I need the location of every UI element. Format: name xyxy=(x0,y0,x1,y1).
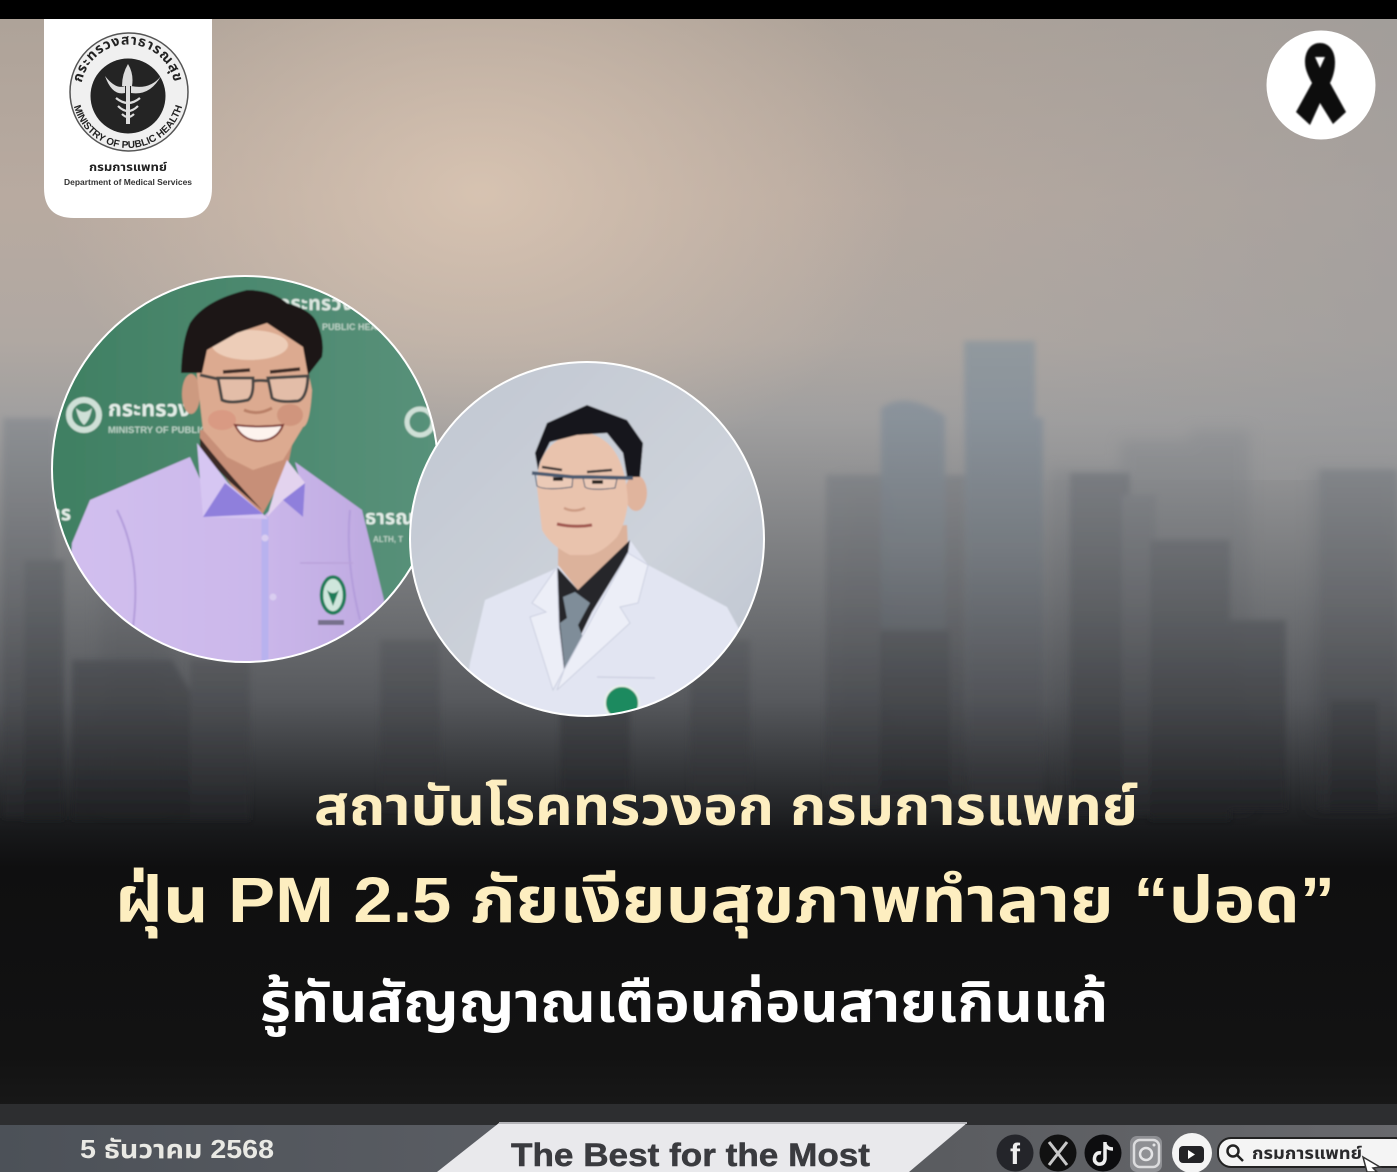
lapels xyxy=(530,567,564,690)
ear xyxy=(182,374,200,414)
eyebrows xyxy=(542,467,612,472)
eyes xyxy=(553,479,603,482)
seal: Ministry of Public Health: MINISTRY OF PUBLIC HEALTH xyxy=(74,104,182,148)
seal: Ministry of Public Health: กระทรวงสาธารณสุข xyxy=(74,36,182,82)
icon: facebook xyxy=(996,1134,1034,1172)
portrait: doctor in purple shirt xyxy=(50,275,440,670)
backdrop logos and wording: าร xyxy=(52,503,71,525)
icon: cursor xyxy=(1363,1157,1380,1172)
grey tie xyxy=(560,592,590,670)
mouth xyxy=(557,524,592,526)
seal: Ministry of Public Health xyxy=(69,32,189,152)
skyline: main towers xyxy=(3,341,1397,820)
white coat xyxy=(468,540,739,715)
footer bar xyxy=(0,1123,1397,1172)
backdrop logos and wording: ธารณ xyxy=(365,507,414,529)
backdrop logos and wording: กระทรวง xyxy=(108,396,190,421)
neck xyxy=(200,430,295,515)
nose xyxy=(564,508,585,510)
icon: black mourning ribbon xyxy=(1266,30,1376,140)
logo caption English: Department of Medical Services xyxy=(64,178,193,187)
icon: youtube xyxy=(1172,1133,1212,1172)
search pill: กรมการแพทย์ xyxy=(1252,1144,1362,1163)
face xyxy=(537,432,628,555)
collar xyxy=(197,443,268,519)
icon: facebook: f xyxy=(1010,1138,1021,1171)
smile xyxy=(235,425,283,441)
date: 5 ธันวาคม 2568 xyxy=(80,1134,274,1164)
backdrop logos and wording: กระทรวง xyxy=(278,293,353,315)
coat badge xyxy=(604,686,640,714)
backdrop logos and wording xyxy=(52,293,433,544)
backdrop logos and wording: MINISTRY OF PUBLIC xyxy=(108,425,207,436)
skyline: distant buildings xyxy=(100,430,1397,810)
heading line 2: main title: ฝุ่น PM 2.5 ภัยเงียบสุขภาพทำลาย “ปอด” xyxy=(115,864,1335,939)
nose xyxy=(244,408,272,413)
slogan text: The Best for the Most xyxy=(511,1137,870,1172)
slogan tab xyxy=(437,1123,967,1172)
backdrop logos and wording: ALTH, T xyxy=(373,535,403,544)
sleeve seams and placket xyxy=(117,510,360,627)
glasses xyxy=(200,375,308,402)
icon: X xyxy=(1040,1134,1076,1172)
backdrop logos and wording: PUBLIC HEALTH xyxy=(322,322,394,332)
eyebrows xyxy=(223,369,300,372)
glasses xyxy=(532,473,633,489)
top black bar xyxy=(0,0,1397,19)
face xyxy=(197,322,312,470)
search pill xyxy=(1218,1138,1397,1167)
purple shirt xyxy=(68,457,384,670)
neck xyxy=(558,525,628,590)
logo caption Thai: กรมการแพทย์ xyxy=(89,160,167,174)
icon: tiktok xyxy=(1084,1134,1122,1172)
black shirt xyxy=(557,540,630,670)
hair xyxy=(535,405,643,477)
hair xyxy=(181,290,323,375)
portrait: doctor in white coat xyxy=(408,360,768,725)
logo card: Department of Medical Services xyxy=(44,19,212,218)
heading line 3: subtitle: รู้ทันสัญญาณเตือนก่อนสายเกินแก้ xyxy=(260,971,1108,1037)
icon: instagram xyxy=(1130,1136,1162,1172)
heading line 1: institute name: สถาบันโรคทรวงอก กรมการแพทย์ xyxy=(314,777,1138,837)
ear xyxy=(625,475,647,511)
shirt pocket and badge xyxy=(301,562,328,564)
